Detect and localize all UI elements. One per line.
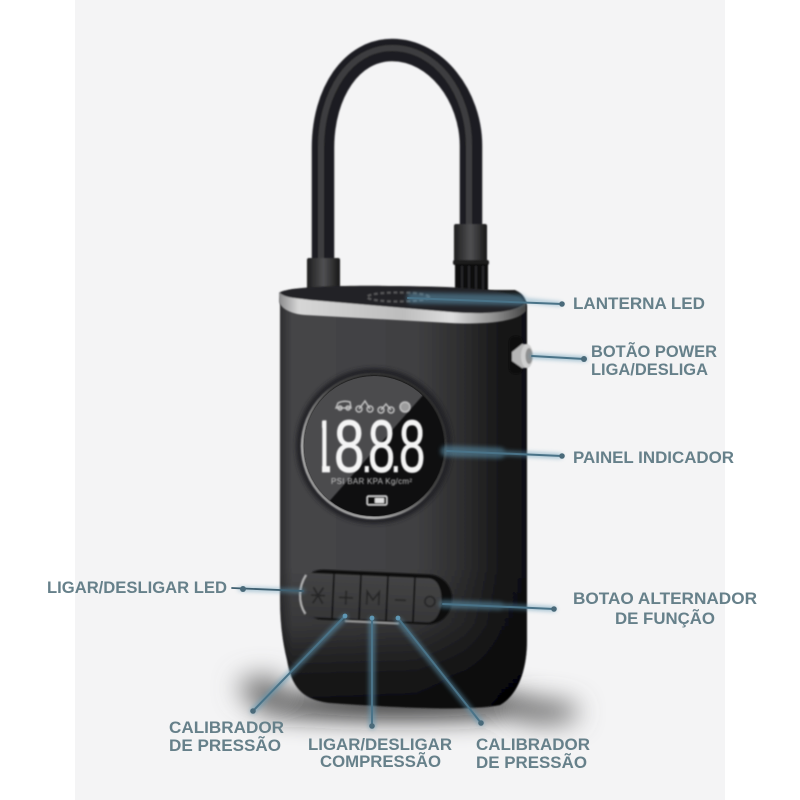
label: ligar/desligar led: LIGAR/DESLIGAR LED	[47, 578, 227, 597]
label: botão power: LIGA/DESLIGA	[591, 360, 708, 379]
label: botão power	[591, 341, 717, 379]
label: botao alternador: DE FUNÇÃO	[615, 608, 715, 628]
line: lanterna	[408, 298, 565, 307]
mode icons	[336, 401, 410, 413]
main body	[280, 290, 527, 708]
pressure readout: 8	[334, 405, 364, 488]
unit labels: PSI BAR KPA Kg/cm²	[331, 477, 412, 486]
battery icon	[367, 496, 387, 505]
pressure readout: 8	[399, 406, 425, 489]
pressure readout: .	[362, 424, 372, 484]
shackle hose	[321, 48, 471, 270]
label: ligar/desligar compressão	[308, 735, 452, 771]
line: compressao	[369, 616, 375, 729]
display panel	[290, 368, 452, 524]
label: ligar/desligar compressão: COMPRESSÃO	[320, 751, 441, 771]
label: calibrador direito: CALIBRADOR	[476, 735, 590, 754]
label: ligar/desligar compressão: LIGAR/DESLIGAR	[308, 735, 452, 754]
label: calibrador esquerdo: CALIBRADOR	[169, 718, 284, 737]
line: power	[532, 356, 587, 362]
label: painel indicador: PAINEL INDICADOR	[573, 448, 734, 467]
label: botao alternador: BOTAO ALTERNADOR	[573, 589, 757, 608]
LED grille	[367, 292, 429, 302]
glass reflection	[304, 376, 423, 500]
divider lines	[332, 574, 415, 622]
line glow	[240, 298, 585, 726]
label: calibrador esquerdo: DE PRESSÃO	[169, 735, 281, 755]
line: botao alternador	[443, 604, 557, 612]
button panel	[298, 569, 453, 626]
power button	[509, 336, 533, 374]
pressure readout	[321, 418, 424, 474]
right valve connector	[453, 224, 489, 302]
callout lines	[232, 298, 587, 729]
label: botão power: BOTÃO POWER	[591, 341, 717, 361]
label: calibrador direito	[476, 735, 590, 772]
product: portable air pump	[279, 48, 533, 708]
label: lanterna led: LANTERNA LED	[573, 294, 705, 313]
floor shadow	[238, 676, 579, 723]
button icons	[311, 587, 435, 609]
label: calibrador direito: DE PRESSÃO	[476, 752, 587, 772]
line: ligar led	[232, 586, 303, 592]
label: botao alternador	[573, 589, 757, 628]
pressure readout: .	[390, 424, 401, 484]
top cap and metal rim	[279, 286, 526, 324]
pressure readout: 1	[312, 404, 335, 488]
left collar	[307, 258, 340, 296]
pressure readout: 8	[368, 406, 395, 489]
line: painel	[447, 451, 565, 459]
label: calibrador esquerdo	[169, 718, 284, 755]
line: calibrador direito	[396, 616, 484, 726]
line: calibrador esquerdo	[250, 614, 347, 714]
